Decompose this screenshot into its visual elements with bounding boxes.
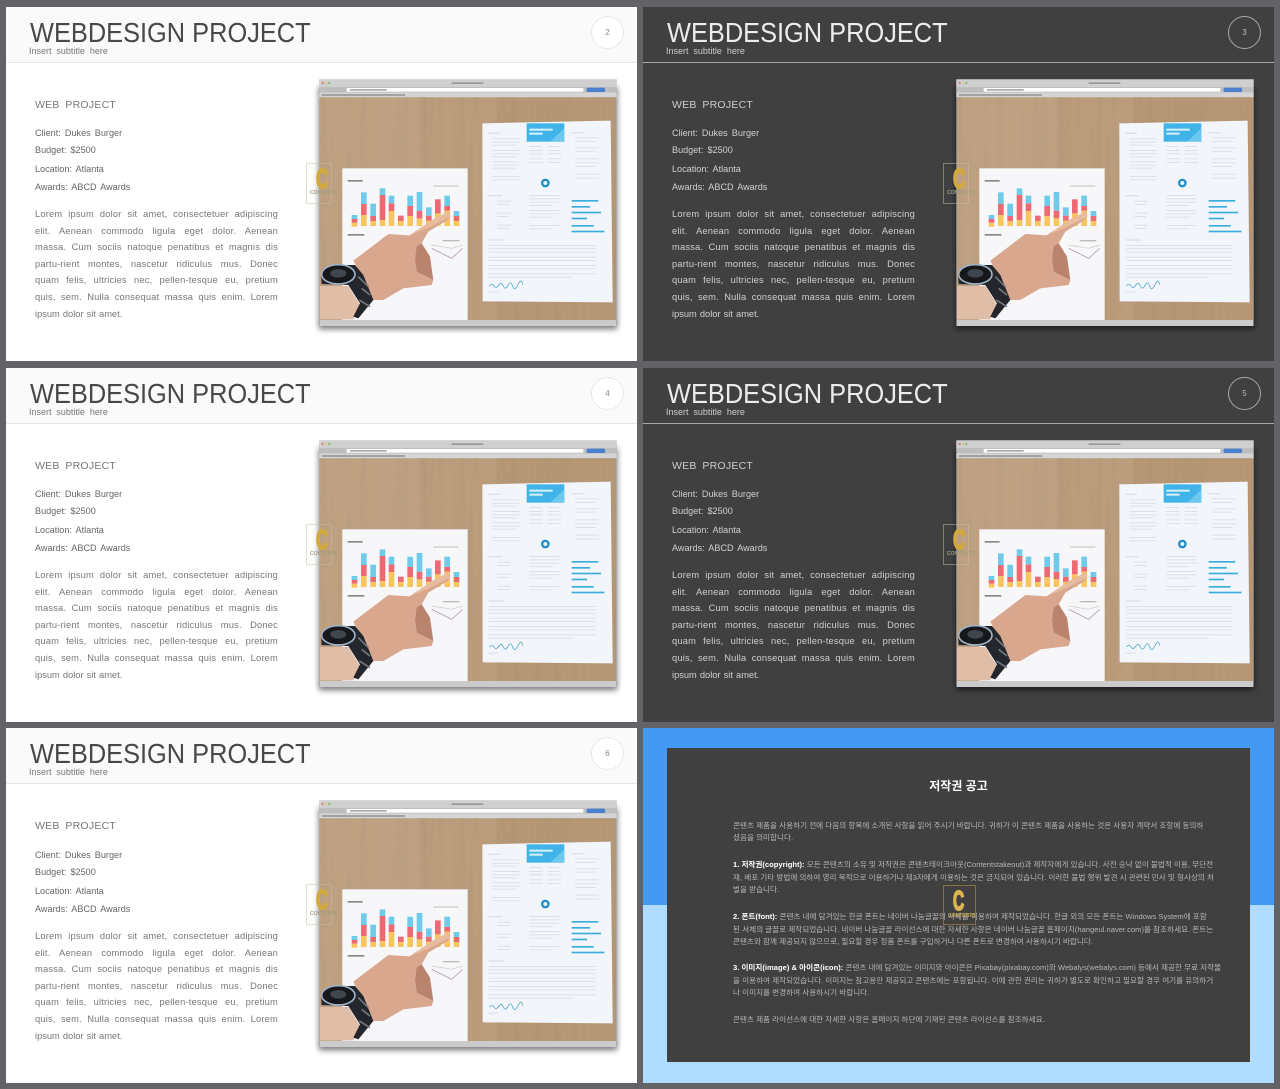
text block: lorem ipsum: Lorem ipsum dolor sit amet, consectetuer adipiscing [35,570,278,580]
text block: intro [733,821,1204,842]
header: title, subtitle and page number: 3 [1242,28,1247,37]
text block: lorem ipsum: elit. Aenean commodo ligula eget dolor. Aenean [672,226,915,236]
text block: lorem ipsum: quis, sem. Nulla consequat massa quis enim. Lorem [35,292,278,302]
meta: client: Client: Dukes Burger [35,850,122,860]
meta: budget: Budget: $2500 [672,145,733,155]
meta: location: Location: Atlanta [35,886,104,896]
text block: lorem ipsum: massa. Cum sociis natoque penatibus et magnis dis [35,242,278,252]
panel: slide 6 light [6,728,637,1083]
text block: section 2 font [733,912,1213,946]
meta: awards: Awards: ABCD Awards [35,182,130,192]
text block: lorem ipsum: elit. Aenean commodo ligula eget dolor. Aenean [672,587,915,597]
meta: location: Location: Atlanta [672,164,741,174]
text block: lorem ipsum: quam felis, ultricies nec, pellen-tesque eu, pretium [672,275,915,285]
text block: license footer: 콘텐츠 제품 라이선스에 대한 자세한 사항은 홈페이지 하단에 기재된 콘텐츠 라이선스를 참조하세요. [733,1015,1045,1024]
panel: copyright notice background [643,728,1274,1083]
heading: web project: WEB PROJECT [35,820,116,832]
text block: lorem ipsum: Lorem ipsum dolor sit amet, consectetuer adipiscing [672,570,915,580]
text block: lorem ipsum: quam felis, ultricies nec, pellen-tesque eu, pretium [35,997,278,1007]
header: title, subtitle and page number: Insert subtitle here [666,407,745,417]
image: browser mockup with charts on desk [954,440,1256,692]
image: browser mockup with charts on desk [314,440,622,694]
meta: awards: Awards: ABCD Awards [35,543,130,553]
text block: lorem ipsum: quis, sem. Nulla consequat massa quis enim. Lorem [672,653,915,663]
watermark logo: CONTENTS [947,190,974,196]
text block: lorem ipsum: Lorem ipsum dolor sit amet, consectetuer adipiscing [35,209,278,219]
text block: lorem ipsum: massa. Cum sociis natoque penatibus et magnis dis [672,603,915,613]
watermark logo: C [953,163,965,194]
header: title, subtitle and page number: Insert subtitle here [666,46,745,56]
watermark logo: C [953,524,965,555]
header: title, subtitle and page number: WEBDESIGN PROJECT [30,17,311,48]
text block: lorem ipsum: partu-rient montes, nascetur ridiculus mus. Donec [35,620,278,630]
text block: lorem ipsum: ipsum dolor sit amet. [672,309,759,319]
header: title, subtitle and page number: WEBDESIGN PROJECT [30,378,311,409]
header: title, subtitle and page number [6,728,637,784]
meta: location: Location: Atlanta [35,164,104,174]
header: title, subtitle and page number: 2 [605,28,610,37]
heading: web project: WEB PROJECT [35,99,116,111]
text block: section 3 image and icon: 3. 이미지(image) & 아이콘(icon): 콘텐츠 내에 담겨있는 이미지와 아이콘은 Pixabay(pixabay.com)와 Webalys(webalys.com) 등에서 제공한 무료 저작물 [733,963,1221,972]
header: title, subtitle and page number [643,368,1274,424]
watermark logo on copyright panel: C [953,885,964,916]
watermark logo [306,884,332,925]
watermark logo: C [316,884,328,915]
watermark logo: CONTENTS [947,551,974,557]
text block: lorem ipsum: quis, sem. Nulla consequat massa quis enim. Lorem [672,292,915,302]
panel: slide 2 light [6,7,637,361]
meta: client: Client: Dukes Burger [672,128,759,138]
meta: budget: Budget: $2500 [672,506,733,516]
text block: lorem ipsum [35,570,278,680]
text block: section 2 font: 콘텐츠와 함께 제공되지 않으므로, 필요할 경우 정품 폰트를 구입하거나 다른 폰트로 변경하여 사용하시기 바랍니다. [733,937,1093,946]
text block: lorem ipsum [35,209,278,319]
text block: section 2 font: 2. 폰트(font): 콘텐츠 내에 담겨있는 한글 폰트는 네이버 나눔글꼴의 서체를 이용하여 제작되었습니다. 한글 외의 모든 폰트는 Windows System에 포함 [733,912,1207,921]
meta: location: Location: Atlanta [672,525,741,535]
meta: awards: Awards: ABCD Awards [672,182,767,192]
text block: lorem ipsum: quis, sem. Nulla consequat massa quis enim. Lorem [35,653,278,663]
text block: lorem ipsum: ipsum dolor sit amet. [35,1031,122,1041]
text block: lorem ipsum: quam felis, ultricies nec, pellen-tesque eu, pretium [35,636,278,646]
meta: awards: Awards: ABCD Awards [672,543,767,553]
watermark logo: CONTENTS [310,911,338,917]
text block: section 2 font: 된 서체의 글꼴로 제작되었습니다. 네이버 나눔글꼴 라이선스에 대한 자세한 사항은 네이버 나눔글꼴 홈페이지(hangeul.naver.com)를 참조하세요. 폰트는 [733,924,1213,934]
text block: lorem ipsum: quis, sem. Nulla consequat massa quis enim. Lorem [35,1014,278,1024]
meta: awards: Awards: ABCD Awards [35,904,130,914]
text block: lorem ipsum: partu-rient montes, nascetur ridiculus mus. Donec [672,259,915,269]
text block: section 3 image and icon: 나 이미지를 변경하여 사용하시기 바랍니다. [733,988,869,997]
meta: budget: Budget: $2500 [35,506,96,516]
text block: lorem ipsum [35,931,278,1041]
text block: lorem ipsum: elit. Aenean commodo ligula eget dolor. Aenean [35,226,278,236]
header: title, subtitle and page number: Insert subtitle here [29,767,108,777]
meta: client: Client: Dukes Burger [35,489,122,499]
meta: budget: Budget: $2500 [35,867,96,877]
panel: slide 4 light [6,368,637,722]
header: title, subtitle and page number: WEBDESIGN PROJECT [667,378,948,409]
watermark logo [943,524,969,565]
text block: section 1 copyright: 재, 배포 기타 방법에 의하여 영리 목적으로 이용하거나 제3자에게 이용하는 것은 금지되어 있습니다. 이러한 불법 행위 발견 시 관련된 민사 및 형사상의 처 [733,872,1214,882]
header: title, subtitle and page number: Insert subtitle here [29,407,108,417]
text block: lorem ipsum: ipsum dolor sit amet. [35,670,122,680]
heading: web project: WEB PROJECT [672,460,753,472]
text block: lorem ipsum: Lorem ipsum dolor sit amet, consectetuer adipiscing [672,209,915,219]
header: title, subtitle and page number [6,7,637,63]
text block: lorem ipsum [672,209,915,319]
text block: lorem ipsum: quam felis, ultricies nec, pellen-tesque eu, pretium [672,636,915,646]
text block: intro: 셨음을 의미합니다. [733,833,793,842]
watermark logo [943,163,969,204]
text block: lorem ipsum: elit. Aenean commodo ligula eget dolor. Aenean [35,587,278,597]
header: title, subtitle and page number: 4 [605,389,610,398]
watermark logo: CONTENTS [310,551,338,557]
watermark logo on copyright panel: CONTENTS [948,913,976,919]
watermark logo: C [316,524,328,555]
text block: lorem ipsum: massa. Cum sociis natoque penatibus et magnis dis [35,964,278,974]
watermark logo: CONTENTS [310,190,338,196]
panel: copyright notice dark card [667,748,1250,1062]
panel: slide 5 dark [643,368,1274,722]
text block: lorem ipsum: quam felis, ultricies nec, pellen-tesque eu, pretium [35,275,278,285]
heading: web project: WEB PROJECT [35,460,116,472]
text block: lorem ipsum: massa. Cum sociis natoque penatibus et magnis dis [672,242,915,252]
header: title, subtitle and page number: WEBDESIGN PROJECT [667,17,948,48]
watermark logo on copyright panel [943,885,976,925]
text block: lorem ipsum: partu-rient montes, nascetur ridiculus mus. Donec [35,259,278,269]
text block: lorem ipsum: partu-rient montes, nascetur ridiculus mus. Donec [35,981,278,991]
text block: section 1 copyright [733,860,1214,894]
text block: section 1 copyright: 1. 저작권(copyright): 모든 콘텐츠의 소유 및 저작권은 콘텐츠테이크아웃(Contentstakeout)과 제작자에게 있습니다. 사전 승낙 없이 불법적 이용, 무단전 [733,860,1213,869]
header: title, subtitle and page number [6,368,637,424]
heading: copyright notice: 저작권 공고 [929,779,988,793]
meta: location: Location: Atlanta [35,525,104,535]
watermark logo: C [316,163,328,194]
text block: lorem ipsum: ipsum dolor sit amet. [35,309,122,319]
watermark logo [306,163,332,204]
text block: section 3 image and icon [733,963,1221,997]
header: title, subtitle and page number [643,7,1274,63]
image: browser mockup with charts on desk [954,79,1256,331]
image: browser mockup with charts on desk [314,800,622,1054]
header: title, subtitle and page number: WEBDESIGN PROJECT [30,738,311,769]
header: title, subtitle and page number: 6 [605,749,610,758]
meta: budget: Budget: $2500 [35,145,96,155]
panel: slide 3 dark [643,7,1274,361]
text block: section 3 image and icon: 을 이용하여 제작되었습니다. 이미지는 참고용만 제공되고 콘텐츠에는 포함됩니다. 이에 관한 권리는 귀하가 별도로 확인하고 필요할 경우 여기를 유의하거 [733,976,1213,984]
text block: lorem ipsum: Lorem ipsum dolor sit amet, consectetuer adipiscing [35,931,278,941]
text block: lorem ipsum: elit. Aenean commodo ligula eget dolor. Aenean [35,948,278,958]
text block: section 1 copyright: 벌을 받습니다. [733,885,779,894]
image: browser mockup with charts on desk [314,79,622,334]
text block: lorem ipsum: partu-rient montes, nascetur ridiculus mus. Donec [672,620,915,630]
heading: web project: WEB PROJECT [672,99,753,111]
text block: intro: 콘텐츠 제품을 사용하기 전에 다음의 항목에 소개된 사항을 읽어 주시기 바랍니다. 귀하가 이 콘텐츠 제품을 사용하는 것은 사용자 계약서 조항에 동의하 [733,821,1203,830]
text block: lorem ipsum: ipsum dolor sit amet. [672,670,759,680]
text block: lorem ipsum: massa. Cum sociis natoque penatibus et magnis dis [35,603,278,613]
watermark logo [306,524,332,565]
meta: client: Client: Dukes Burger [672,489,759,499]
header: title, subtitle and page number: 5 [1242,389,1247,398]
header: title, subtitle and page number: Insert subtitle here [29,46,108,56]
text block: lorem ipsum [672,570,915,680]
meta: client: Client: Dukes Burger [35,128,122,138]
